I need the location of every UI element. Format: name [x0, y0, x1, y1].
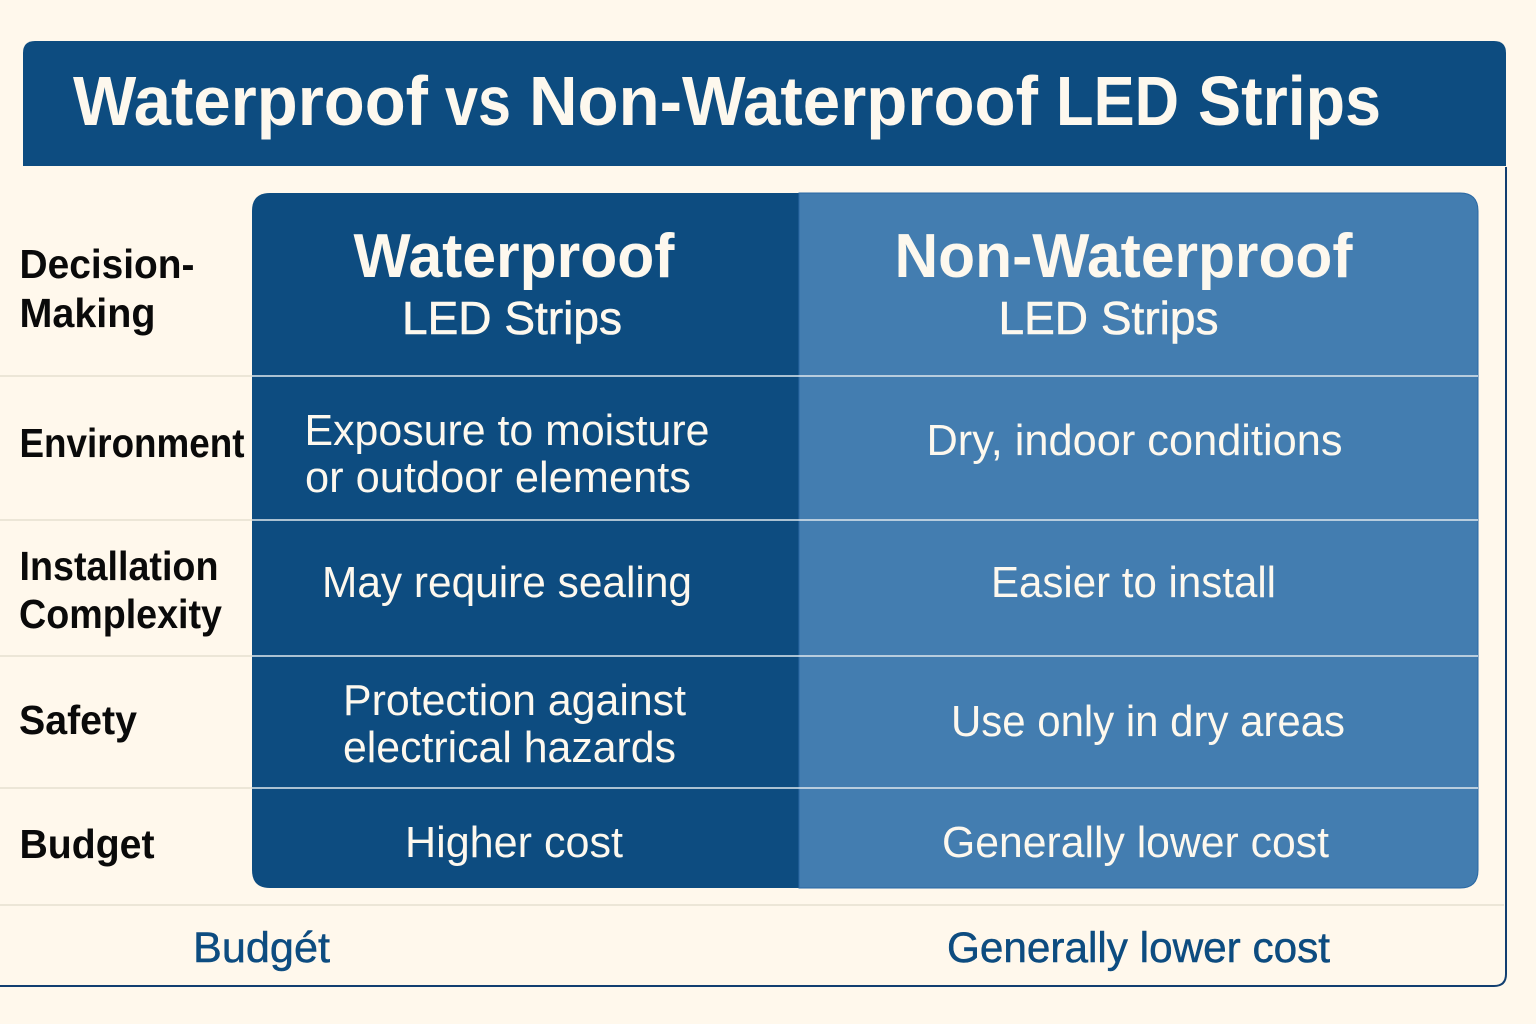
cell: non-waterproof installation: Easier to install [991, 558, 1276, 607]
title banner [23, 41, 1506, 166]
title: Strips [1198, 62, 1381, 140]
table row dividers [252, 376, 1478, 788]
cell: non-waterproof budget: Generally lower cost [942, 818, 1329, 867]
cell: waterproof safety: Protection against [343, 676, 686, 725]
cell: non-waterproof environment: Dry, indoor conditions [926, 416, 1342, 465]
panel: waterproof column [252, 193, 799, 888]
cell: waterproof safety [343, 676, 686, 772]
row label dividers [0, 376, 1504, 905]
row label: safety: Safety [19, 697, 137, 743]
panel: non-waterproof column [799, 193, 1478, 888]
row label: decision-making [20, 241, 194, 336]
row label: installation complexity: Complexity [19, 591, 222, 637]
cell: waterproof environment: or outdoor elements [305, 453, 691, 502]
row label: budget: Budget [20, 821, 155, 867]
title: Non-Waterproof [529, 62, 1039, 140]
cell: waterproof environment [304, 406, 710, 502]
column heading: non-waterproof: LED Strips [998, 292, 1218, 344]
column heading: waterproof [354, 222, 675, 344]
column heading: waterproof: Waterproof [354, 222, 675, 291]
column heading: non-waterproof [894, 222, 1353, 344]
cell: waterproof environment: Exposure to moisture [304, 406, 710, 455]
cell: waterproof installation: May require sealing [322, 558, 692, 607]
row label: decision-making: Making [20, 290, 156, 336]
row label: installation complexity [19, 543, 222, 637]
column heading: waterproof: LED Strips [402, 292, 622, 344]
cell: waterproof budget: Higher cost [405, 818, 623, 867]
cell: non-waterproof safety: Use only in dry areas [951, 697, 1345, 746]
row label: environment: Environment [20, 420, 245, 466]
row label: installation complexity: Installation [20, 543, 218, 589]
cell: waterproof safety: electrical hazards [343, 723, 676, 772]
footer label: budget: Budgét [193, 924, 330, 972]
column heading: non-waterproof: Non-Waterproof [894, 222, 1353, 291]
row label: decision-making: Decision- [20, 241, 194, 287]
title: LED [1056, 62, 1179, 140]
title: Waterproof [73, 62, 429, 140]
title [73, 62, 1381, 140]
footer value: generally lower cost: Generally lower cost [947, 924, 1330, 972]
title: vs [445, 62, 511, 140]
panel: outer frame [0, 167, 1506, 986]
